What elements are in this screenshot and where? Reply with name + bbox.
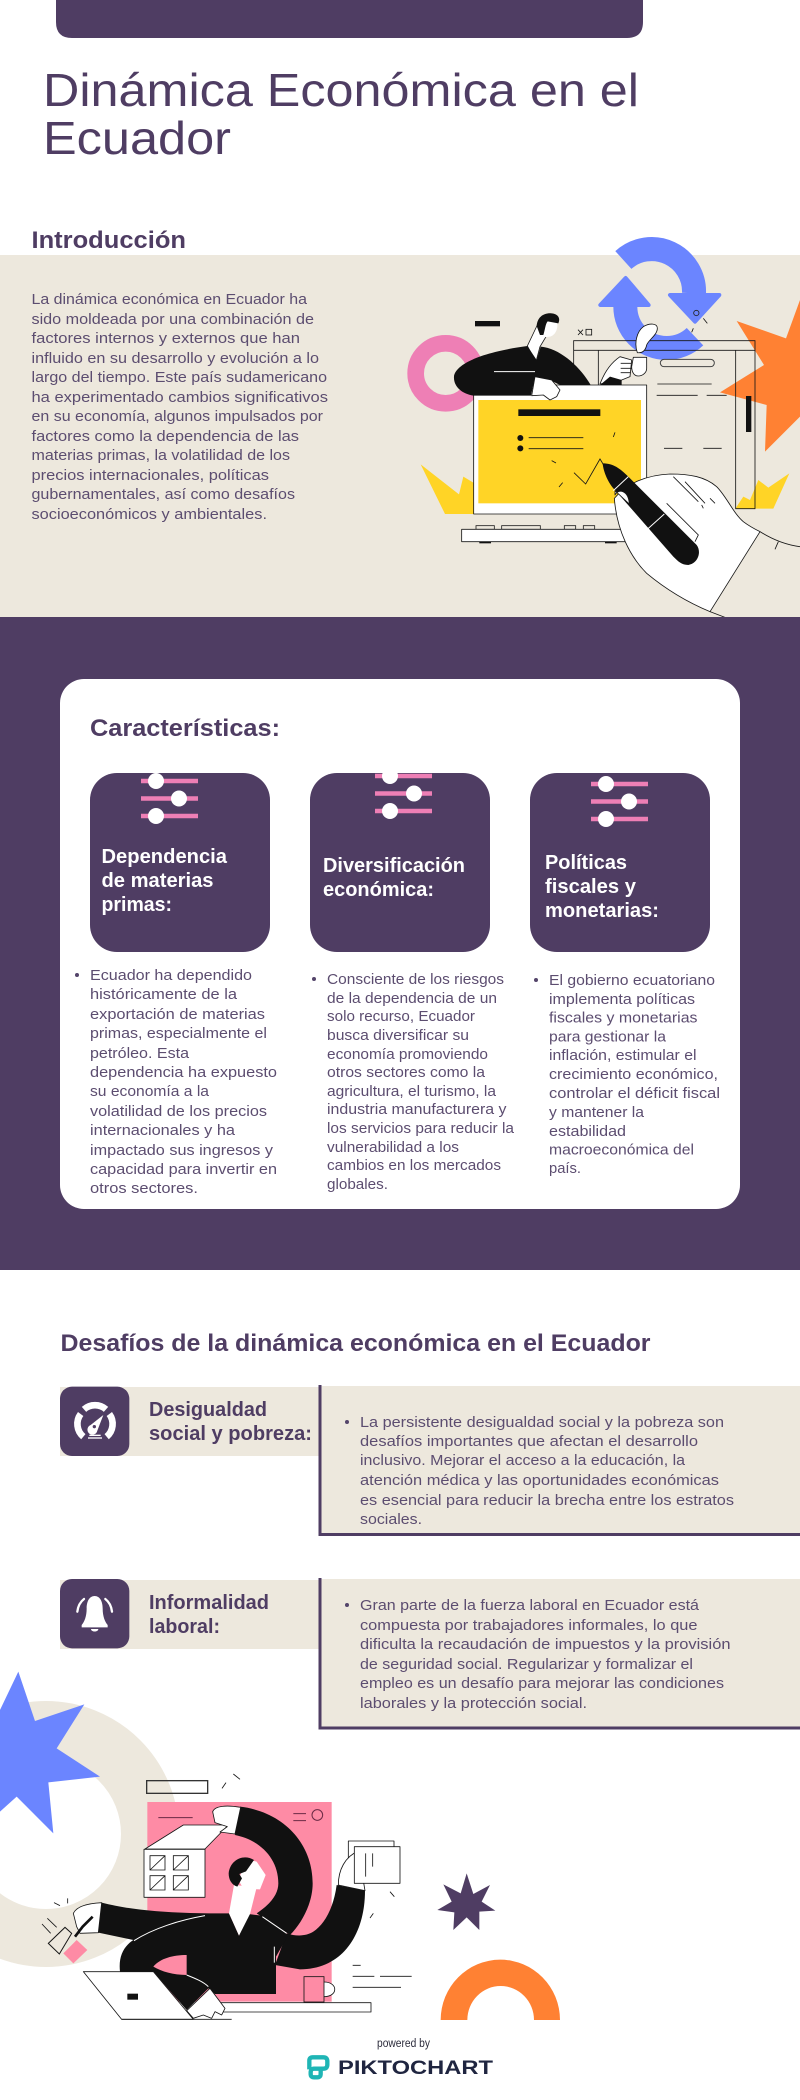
text block: introduction: precios internacionales, políticas (32, 467, 269, 484)
title: Ecuador (43, 112, 231, 164)
left hand with pen (48, 1903, 102, 1963)
text panel: compuesta por trabajadores informales, lo que (360, 1617, 698, 1634)
text panel: desafíos importantes que afectan el desarrollo (360, 1433, 698, 1450)
body (98, 1903, 288, 2010)
illustration: multitasking person (42, 1774, 412, 2019)
text block: column 2: agricultura, el turismo, la (327, 1083, 497, 1100)
text block: column 2: de la dependencia de un (327, 990, 497, 1007)
text block: column 1: Ecuador ha dependido (90, 967, 252, 984)
text block: introduction (32, 291, 328, 523)
text panel: de seguridad social. Regularizar y formalizar el (360, 1656, 693, 1673)
text block: column 1: impactado sus ingresos y (90, 1142, 274, 1159)
text block: introduction: influido en su desarrollo y evolución a lo (32, 350, 319, 367)
text block: column 2: cambios en los mercados (327, 1157, 501, 1174)
text block: column 2: los servicios para reducir la (327, 1120, 515, 1137)
text panel: La persistente desigualdad social y la pobreza son (360, 1414, 724, 1431)
text block: column 1: exportación de materias (90, 1006, 265, 1023)
text panel (320, 1578, 800, 1728)
illustration: person, laptop and hand with pen (416, 249, 800, 617)
house (144, 1825, 228, 1897)
text block: column 2: Consciente de los riesgos (327, 971, 504, 988)
panel: desigualdad social y pobreza (60, 1385, 800, 1534)
footer: powered by piktochart: PIKTOCHART (338, 2057, 493, 2079)
card title: Dependencia (102, 846, 228, 868)
text block: column 3: inflación, estimular el (549, 1047, 696, 1064)
text block: column 2 (312, 971, 515, 1193)
backdrop details (42, 1774, 394, 1933)
text panel: laborales y la protección social. (360, 1695, 587, 1712)
raised arm (235, 1807, 313, 1935)
heading: desafíos: Desafíos de la dinámica económica en el Ecuador (60, 1330, 650, 1357)
window outline (475, 310, 755, 509)
text block: column 3: crecimiento económico, (549, 1066, 718, 1083)
label (149, 1592, 269, 1638)
footer: powered by piktochart: powered by (377, 2038, 430, 2050)
icon: blue refresh arrows (600, 249, 719, 348)
footer: powered by piktochart (309, 2038, 493, 2079)
panel: introduction background (0, 255, 800, 617)
text block: column 2: vulnerabilidad a los (327, 1139, 459, 1156)
text block: column 2: industria manufacturera y (327, 1101, 507, 1118)
text block: column 1 (75, 967, 277, 1197)
text panel: es esencial para reducir la brecha entre los estratos (360, 1492, 734, 1509)
text block: column 2: economía promoviendo (327, 1046, 488, 1063)
text panel: inclusivo. Mejorar el acceso a la educación, la (360, 1452, 686, 1469)
card title: económica: (323, 879, 434, 901)
text panel: empleo es un desafío para mejorar las condiciones (360, 1675, 724, 1692)
panel: características background (0, 617, 800, 1270)
card title (323, 855, 465, 901)
card title: fiscales y (545, 876, 637, 898)
text block: column 3 (534, 972, 720, 1177)
text block: column 1: primas, especialmente el (90, 1025, 267, 1042)
title: Dinámica Económica en el (43, 64, 639, 116)
text block: column 2: solo recurso, Ecuador (327, 1008, 475, 1025)
text block: introduction: en su economía, algunos impulsados por (32, 408, 323, 425)
card: dependencia de materias primas (90, 773, 270, 952)
laptop screen (474, 385, 647, 514)
icon: gauge (60, 1387, 129, 1456)
card title: monetarias: (545, 900, 659, 922)
text panel: dificulta la recaudación de impuestos y la provisión (360, 1636, 730, 1653)
desk and lower hand (187, 1988, 371, 2018)
text block: introduction: largo del tiempo. Este país sudamericano (32, 369, 327, 386)
keyboard (462, 526, 633, 543)
text panel (320, 1385, 800, 1534)
icon: yellow crown shapes (421, 464, 789, 514)
text block: column 1: internacionales y ha (90, 1122, 236, 1139)
text block: introduction: ha experimentado cambios significativos (32, 389, 328, 406)
icon: beige ring (0, 1730, 150, 1938)
text block: column 3: controlar el déficit fiscal (549, 1085, 720, 1102)
card title (102, 846, 228, 916)
text block: column 2: otros sectores como la (327, 1064, 486, 1081)
body cutout (153, 1955, 187, 1975)
text block: column 3: estabilidad (549, 1123, 626, 1140)
label: social y pobreza: (149, 1423, 312, 1445)
icon: sliders (141, 773, 198, 824)
icon: piktochart logo (309, 2057, 327, 2077)
text panel: Gran parte de la fuerza laboral en Ecuador está (360, 1597, 700, 1614)
speed lines (353, 1965, 412, 1987)
text block: column 3: fiscales y monetarias (549, 1010, 698, 1026)
text block: column 3: para gestionar la (549, 1028, 667, 1046)
label: Informalidad (149, 1592, 269, 1614)
text panel: sociales. (360, 1511, 422, 1528)
icon: navy star (437, 1873, 495, 1930)
text block: column 1: históricamente de la (90, 986, 238, 1003)
icon: sliders (591, 776, 648, 827)
label: Desigualdad (149, 1399, 267, 1421)
text block: introduction: gubernamentales, así como desafíos (32, 486, 295, 503)
icon: pink ring (416, 343, 476, 403)
label (149, 1399, 312, 1445)
card title: primas: (102, 894, 172, 916)
text block: column 3: y mantener la (549, 1104, 645, 1121)
card title: de materias (102, 870, 214, 892)
text block: introduction: La dinámica económica en Ecuador ha (32, 291, 308, 308)
text block: column 1: capacidad para invertir en (90, 1161, 277, 1178)
text block: introduction: socioeconómicos y ambientales. (32, 506, 267, 523)
right arm (275, 1885, 365, 1969)
text block: column 3: país. (549, 1160, 581, 1177)
text block: introduction: sido moldeada por una combinación de (32, 311, 314, 328)
heading: características: Características: (90, 715, 280, 742)
icon: orange arch (441, 1960, 560, 2020)
text block: column 3: macroeconómica del (549, 1142, 694, 1158)
text block: column 1: otros sectores. (90, 1180, 198, 1197)
header bar (56, 0, 643, 38)
body highlights (134, 1916, 287, 1987)
person with cup (454, 313, 657, 400)
card: políticas fiscales y monetarias (530, 773, 710, 952)
card title (545, 852, 659, 922)
icon: sliders (375, 768, 432, 819)
icon: blue star (0, 1672, 100, 1833)
pink backdrop (147, 1802, 332, 2002)
panel: características card (60, 679, 740, 1209)
text block: column 1: petróleo. Esta (90, 1045, 190, 1062)
text block: introduction: factores internos y externos que han (32, 330, 300, 347)
text block: column 1: volatilidad de los precios (90, 1103, 267, 1120)
card: diversificación económica (310, 768, 490, 952)
text block: introduction: factores como la dependencia de las (32, 428, 299, 445)
text block: column 3: implementa políticas (549, 991, 695, 1008)
head (229, 1857, 266, 1936)
label: laboral: (149, 1616, 220, 1638)
icon: orange star (720, 300, 800, 452)
laptop (83, 1972, 232, 2019)
card title: Diversificación (323, 855, 465, 877)
text block: introduction: materias primas, la volatilidad de los (32, 447, 290, 464)
text block: column 1: su economía a la (90, 1083, 210, 1100)
mug (304, 1977, 335, 2002)
text panel: atención médica y las oportunidades económicas (360, 1472, 719, 1489)
card title: Políticas (545, 852, 627, 874)
heading: introducción: Introducción (32, 227, 186, 254)
icon: bell (60, 1579, 129, 1648)
hand holding pen (603, 463, 800, 617)
top hand (213, 1806, 241, 1834)
title (43, 64, 639, 164)
text block: column 1: dependencia ha expuesto (90, 1064, 277, 1081)
text block: column 2: busca diversificar su (327, 1027, 469, 1044)
text block: column 3: El gobierno ecuatoriano (549, 972, 715, 989)
papers and hand (338, 1841, 400, 1891)
text block: column 2: globales. (327, 1176, 388, 1193)
panel: informalidad laboral (60, 1578, 800, 1728)
